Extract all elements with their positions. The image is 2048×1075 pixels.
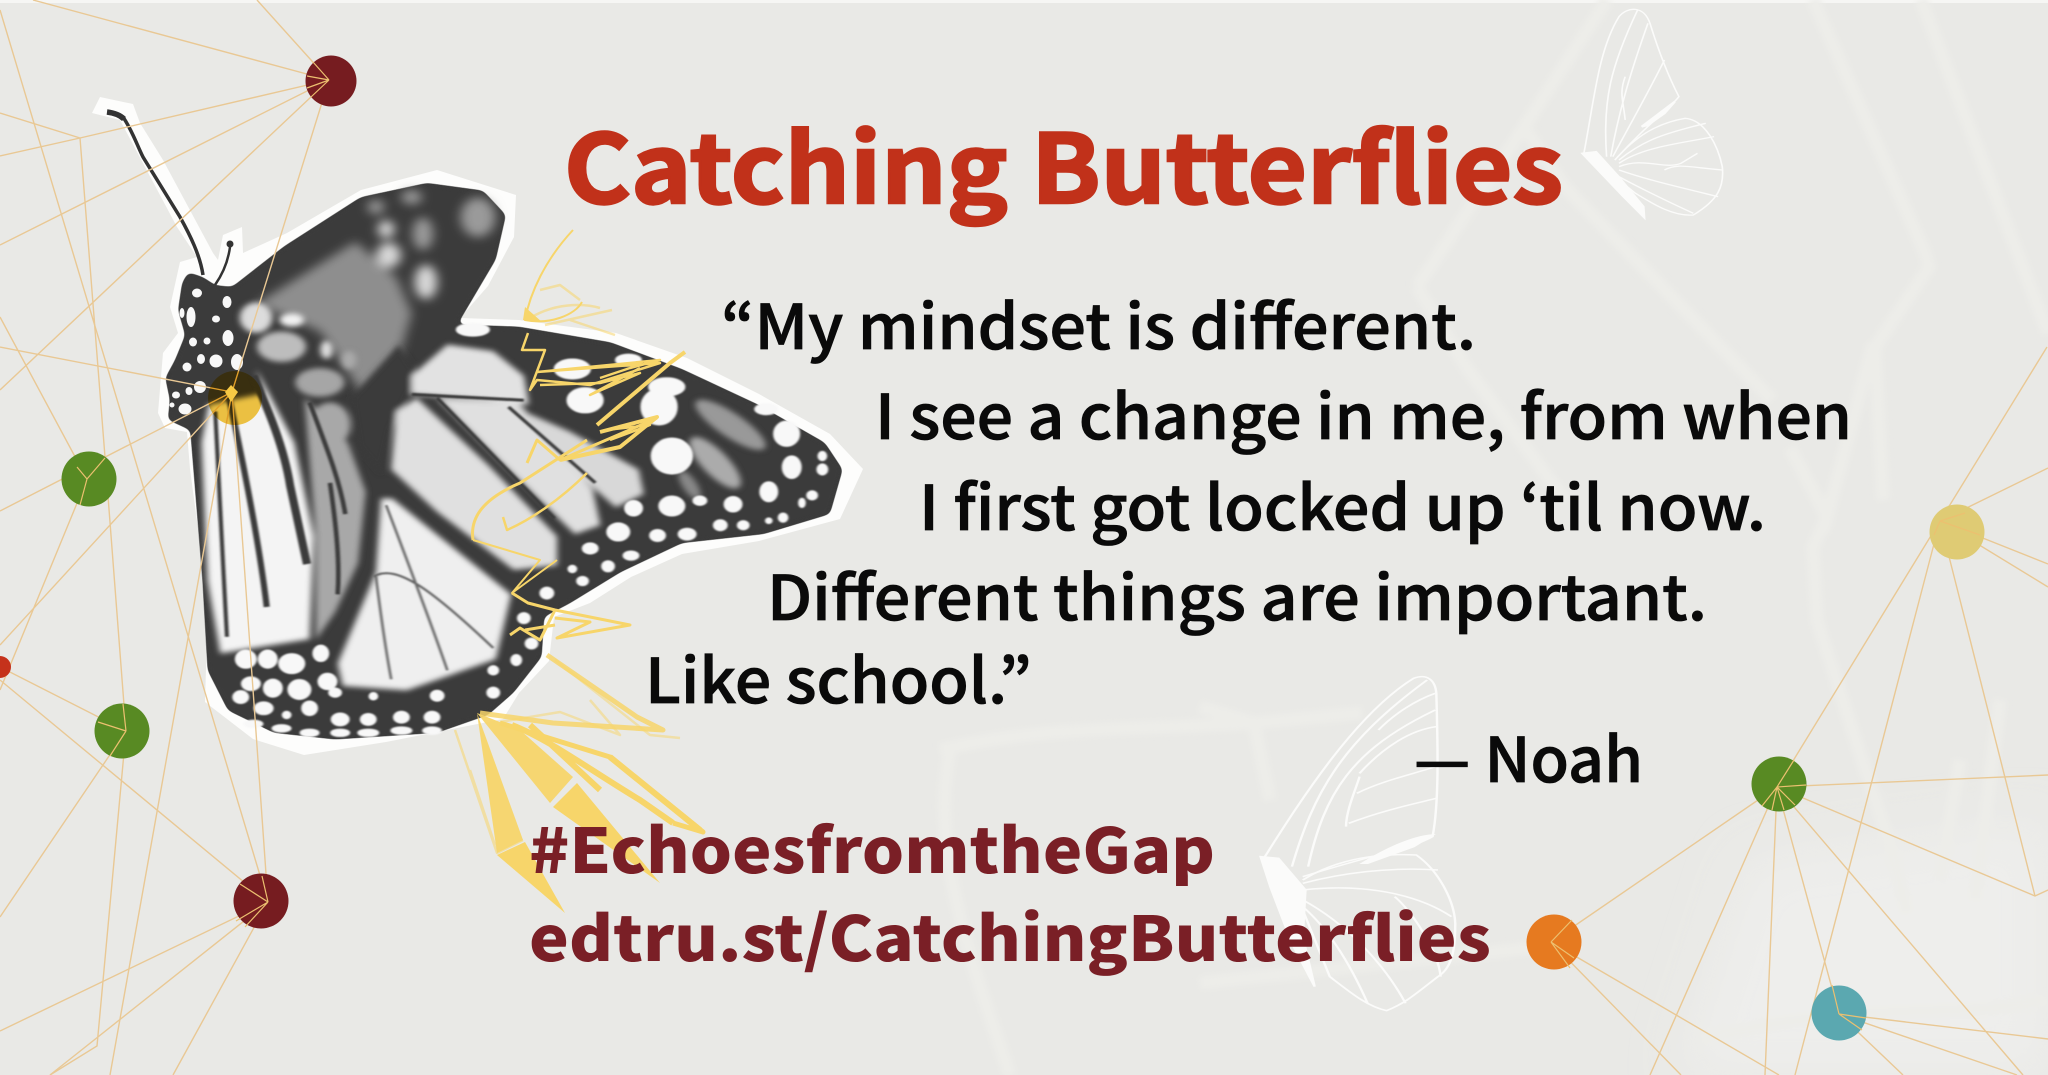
white spots [233, 323, 827, 736]
node: khaki right [1930, 504, 1984, 560]
quote line 5: Like school.” [645, 631, 1032, 721]
lower scribble [455, 593, 703, 853]
node: yellow over thorax [208, 371, 262, 425]
head and thorax spots [170, 288, 243, 414]
attribution: — Noah [1414, 710, 1643, 800]
wing veins [215, 376, 595, 679]
yellow hub glint [225, 385, 238, 402]
background: faint wing pattern [940, 0, 2048, 1075]
antennae [107, 112, 234, 285]
node: teal [1812, 986, 1866, 1040]
yellow scribbles on the wing edge [455, 230, 703, 913]
quote text [645, 277, 1852, 721]
title: Catching Butterflies [564, 94, 1563, 231]
quote line 2: I see a change in me, from when [875, 367, 1852, 457]
quote line 3: I first got locked up ‘til now. [919, 458, 1766, 548]
small white butterfly outline top right [1582, 9, 1723, 218]
upper scribble [473, 230, 685, 593]
monarch butterfly cut-out [92, 97, 863, 755]
wing cells [201, 302, 773, 690]
node: dark red lower [234, 874, 288, 928]
node: dark red top [306, 56, 356, 106]
solid fans [477, 713, 523, 853]
quote line 4: Different things are important. [767, 548, 1707, 638]
forewing soft patches [256, 190, 495, 398]
node: green right [1752, 756, 1806, 812]
node: red left edge [0, 656, 11, 678]
node: green left lower [94, 704, 150, 758]
quote line 1: “My mindset is different. [721, 277, 1476, 367]
large white butterfly outline bottom centre [1261, 677, 1455, 1011]
node: orange [1526, 914, 1582, 970]
white paper outline [92, 97, 863, 755]
link: edtru.st/CatchingButterflies [529, 889, 1491, 979]
dark wing silhouette [165, 183, 843, 740]
node: green left upper [62, 452, 116, 506]
hashtag: #EchoesfromtheGap [529, 801, 1215, 891]
